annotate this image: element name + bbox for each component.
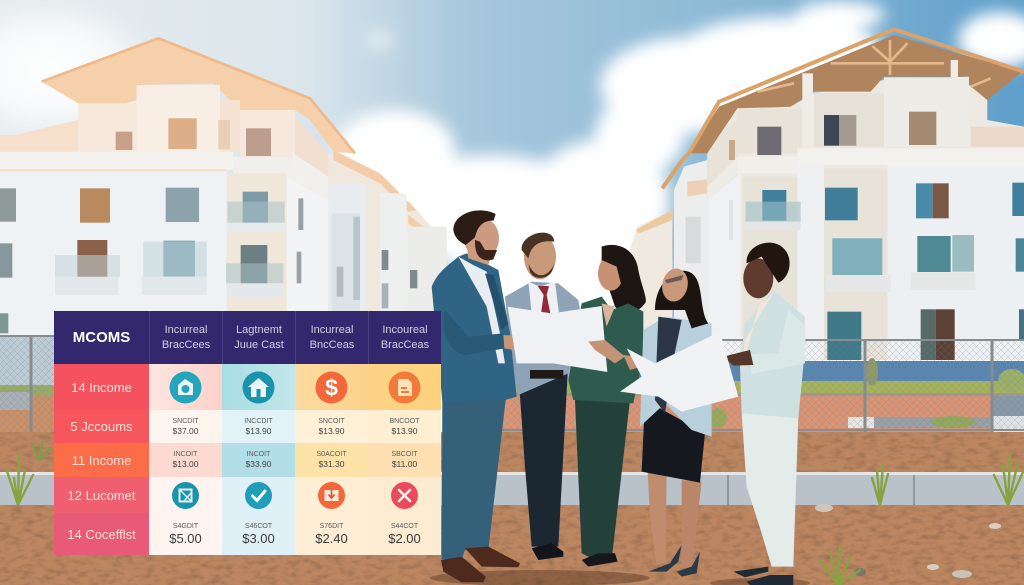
person: man with red tie [505, 233, 580, 560]
value cell: INCCDIT [244, 418, 273, 424]
icon cell: cross tools [368, 477, 441, 513]
header: column 3: BncCeas [310, 338, 354, 350]
value cell: SNCDIT [172, 418, 199, 424]
row label: 5 Jccoums: 5 Jccoums [70, 419, 133, 434]
icon cell: document [368, 364, 441, 410]
value cell [368, 410, 441, 443]
fence yard: blue wall, lawn and path [0, 335, 1024, 440]
header: column 3: Incurreal [311, 324, 353, 336]
header: column 1: Incurreal [165, 324, 207, 336]
value cell: $37.00 [172, 426, 198, 436]
icon cell: drop [149, 364, 222, 410]
value cell: S4GDIT [173, 523, 198, 530]
person: tall man in blue suit [432, 210, 534, 582]
header: column 1: BracCees [162, 338, 210, 350]
header: column 2: Lagtnemt [236, 324, 282, 336]
value cell [149, 410, 222, 443]
value cell: INCOIT [247, 451, 270, 458]
value cell: S76DIT [320, 523, 343, 530]
value cell: $33.90 [246, 459, 272, 469]
value cell [222, 410, 295, 443]
value cell [368, 513, 441, 555]
row label: 14 Cocefflst [54, 513, 149, 555]
value cell: SBCOIT [391, 451, 418, 458]
header: column 2: Juue Cast [234, 338, 284, 350]
icon cell: download tray [295, 477, 368, 513]
value cell: $3.00 [242, 531, 275, 546]
blueprint: left sheet [508, 306, 607, 372]
value cell: INCOIT [174, 451, 197, 458]
value cell [368, 443, 441, 477]
header: column 4 [368, 311, 441, 364]
value cell: $13.90 [392, 426, 418, 436]
building: left [0, 38, 447, 341]
icon cell: check [222, 477, 295, 513]
value cell [295, 513, 368, 555]
value cell: S46COT [245, 523, 272, 530]
row label: 12 Lucomet [54, 477, 149, 513]
value cell: $31.30 [318, 459, 344, 469]
value cell: S0ACOIT [317, 451, 346, 458]
table header: MCOMS [54, 311, 149, 364]
value cell [295, 410, 368, 443]
clouds [0, 0, 1024, 330]
value cell: $13.90 [318, 426, 344, 436]
team of five [432, 210, 806, 585]
person: woman in green suit [568, 245, 646, 567]
value cell [149, 443, 222, 477]
row label: 14 Income: 14 Income [71, 380, 132, 394]
person: woman with glasses and black skirt [623, 266, 712, 577]
value cell: $13.90 [246, 426, 272, 436]
row label: 14 Cocefflst: 14 Cocefflst [67, 526, 136, 542]
row label: 14 Income [54, 364, 149, 410]
building: right [631, 29, 1024, 360]
person: woman in white suit [723, 243, 806, 585]
plants [6, 442, 1024, 585]
row label: 12 Lucomet: 12 Lucomet [68, 488, 135, 502]
header: column 4: Incoureal [382, 324, 428, 336]
value cell: $2.00 [388, 531, 421, 546]
value cell: BNCOOT [390, 418, 419, 424]
low concrete curb [0, 472, 1024, 505]
value cell [149, 513, 222, 555]
value cell [295, 443, 368, 477]
value cell: SNCOIT [318, 418, 345, 424]
blueprint: right sheet [620, 332, 738, 412]
value cell: $5.00 [169, 531, 202, 546]
cost table panel [54, 311, 441, 555]
row label: 11 Income: 11 Income [72, 452, 131, 468]
icon cell: dollar: $ [325, 374, 338, 400]
row label: 5 Jccoums [54, 410, 149, 443]
table header: MCOMS: MCOMS [73, 329, 130, 346]
fence [0, 335, 1024, 436]
value cell [222, 513, 295, 555]
value cell: $11.00 [392, 459, 417, 469]
hand on sheet [588, 340, 625, 363]
row label: 11 Income [54, 443, 149, 477]
icon cell: dollar [295, 364, 368, 410]
sky [0, 0, 1024, 345]
icon cell: house [222, 364, 295, 410]
value cell: S44COT [391, 523, 418, 530]
ground: soil [0, 432, 1024, 585]
header: column 2 [222, 311, 295, 364]
value cell: $2.40 [315, 531, 348, 546]
value cell [222, 443, 295, 477]
ground shadows and stones [430, 504, 1001, 585]
icon cell: map square [149, 477, 222, 513]
header: column 4: BracCeas [381, 338, 429, 350]
header: column 1 [149, 311, 222, 364]
header: column 3 [295, 311, 368, 364]
value cell: $13.00 [172, 459, 198, 469]
